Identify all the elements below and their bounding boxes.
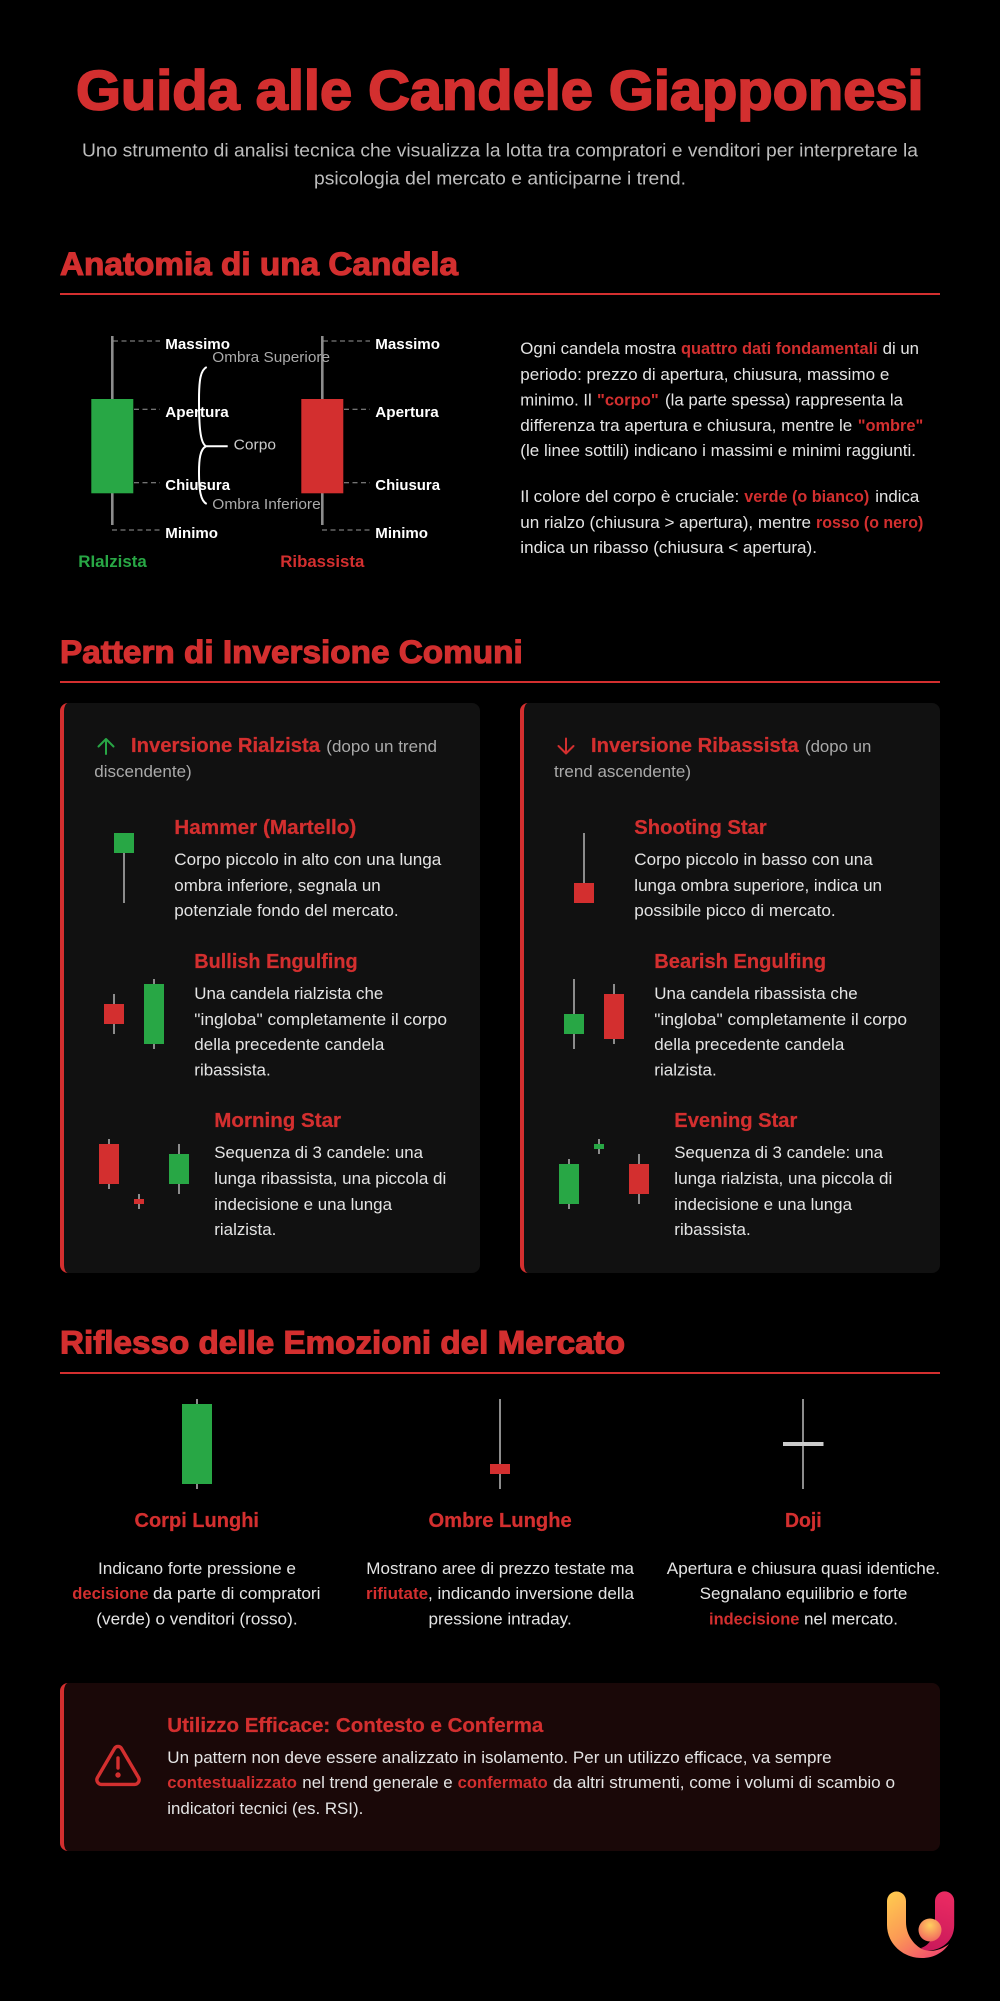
icon: bearish engulfing [564, 979, 624, 1049]
pattern: shooting star [634, 816, 882, 920]
pattern: evening star: lunga rialzista, una piccola di [674, 1170, 892, 1188]
icon: morning star [99, 1139, 189, 1209]
callout text [167, 1749, 895, 1818]
bullish candle [91, 336, 231, 542]
bearish candle [301, 336, 441, 542]
column: doji [667, 1399, 940, 1629]
pattern: hammer: Hammer (Martello) [174, 816, 356, 839]
pattern: morning star [214, 1109, 446, 1239]
callout text: indicatori tecnici (es. RSI). [167, 1800, 363, 1818]
panel: inversione ribassista [520, 703, 940, 1273]
pattern: bullish engulfing: ribassista. [194, 1062, 271, 1080]
icon: down arrow [558, 738, 574, 754]
subtitle: psicologia del mercato e anticiparne i trend. [314, 168, 686, 188]
icon: long shadow candle [490, 1399, 510, 1489]
pattern: bullish engulfing: della precedente candela [194, 1036, 385, 1054]
panel: inversione rialzista [60, 703, 480, 1273]
callout text: contestualizzato [167, 1774, 297, 1792]
anatomy description: "corpo" [597, 391, 659, 409]
icon: shooting star [574, 833, 594, 903]
pattern: bearish engulfing: della precedente candela [654, 1036, 845, 1054]
anatomy description: Il colore del corpo è cruciale: [520, 488, 739, 506]
bullish candle: Apertura [165, 404, 229, 421]
pattern: morning star: Morning Star [214, 1109, 341, 1132]
panel heading: (dopo un trend [326, 738, 437, 756]
callout: contesto e conferma [60, 1683, 940, 1851]
column text: (verde) o venditori (rosso). [96, 1611, 298, 1629]
column text: Apertura e chiusura quasi identiche. [667, 1560, 940, 1578]
pattern: shooting star: possibile picco di mercato. [634, 902, 836, 920]
icon: up arrow [98, 739, 114, 754]
icon: evening star [559, 1139, 649, 1209]
column text: da parte di compratori [153, 1585, 320, 1603]
column text: Indicano forte pressione e [98, 1560, 296, 1578]
callout background [60, 1683, 940, 1851]
pattern: evening star: ribassista. [674, 1221, 751, 1239]
bearish candle: Chiusura [375, 477, 441, 494]
heading: emozioni: Riflesso delle Emozioni del Mercato [60, 1324, 625, 1360]
heading: anatomia: Anatomia di una Candela [60, 246, 458, 282]
column text: indecisione [709, 1611, 799, 1629]
anatomy description: differenza tra apertura e chiusura, mentre le [520, 417, 852, 435]
heading: pattern: Pattern di Inversione Comuni [60, 634, 523, 670]
brace labels [212, 350, 330, 513]
pattern: bullish engulfing: Una candela rialzista che [194, 985, 383, 1003]
anatomy description: minimo. Il [520, 391, 592, 409]
pattern: morning star: rialzista. [214, 1221, 276, 1239]
pattern: evening star: Sequenza di 3 candele: una [674, 1144, 884, 1162]
pattern: evening star [674, 1109, 892, 1239]
icon: doji candle [783, 1399, 824, 1489]
icon: bullish engulfing [104, 979, 164, 1049]
column text: pressione intraday. [428, 1611, 572, 1629]
pattern: hammer: Corpo piccolo in alto con una lunga [174, 851, 442, 869]
pattern: bearish engulfing [654, 950, 907, 1080]
anatomy description: indica [875, 488, 920, 506]
icon: hammer [114, 833, 134, 903]
panel heading: (dopo un [805, 738, 871, 756]
callout text: confermato [458, 1774, 548, 1792]
pattern: shooting star: Corpo piccolo in basso con una [634, 851, 874, 869]
column title: Corpi Lunghi [134, 1509, 259, 1532]
column: ombre lunghe [366, 1399, 635, 1629]
icon: long body candle [182, 1399, 212, 1489]
anatomy description: quattro dati fondamentali [681, 340, 878, 358]
panel background [520, 703, 940, 1273]
column text: Segnalano equilibrio e forte [700, 1585, 907, 1603]
anatomy description: rosso (o nero) [816, 514, 923, 532]
column text: nel mercato. [804, 1611, 898, 1629]
anatomy description: (le linee sottili) indicano i massimi e minimi raggiunti. [520, 442, 916, 460]
column text [667, 1560, 940, 1629]
panel background [60, 703, 480, 1273]
column title: Doji [785, 1509, 822, 1532]
callout title: Utilizzo Efficace: Contesto e Conferma [167, 1714, 544, 1737]
panel heading [554, 734, 871, 781]
anatomy diagram [78, 336, 441, 571]
callout text: nel trend generale e [302, 1774, 453, 1792]
brace labels: Corpo [234, 438, 276, 454]
anatomy description: indica un ribasso (chiusura < apertura). [520, 539, 817, 557]
anatomy description: di un [883, 340, 919, 358]
pattern: morning star: Sequenza di 3 candele: una [214, 1144, 424, 1162]
title: Guida alle Candele Giapponesi [76, 58, 924, 122]
pattern: morning star: lunga ribassista, una piccola di [214, 1170, 446, 1188]
column text: rifiutate [366, 1585, 428, 1603]
column text: , indicando inversione della [428, 1585, 635, 1603]
bullish candle: Minimo [165, 525, 218, 542]
pattern: hammer [174, 816, 442, 920]
pattern: hammer: ombra inferiore, segnala un [174, 877, 381, 895]
anatomy description: verde (o bianco) [744, 488, 869, 506]
pattern: morning star: indecisione e una lunga [214, 1196, 393, 1214]
candle captions: RIalzista [78, 553, 148, 571]
pattern: shooting star: Shooting Star [634, 816, 767, 839]
pattern: evening star: Evening Star [674, 1109, 797, 1132]
subtitle [82, 140, 919, 188]
pattern: hammer: potenziale fondo del mercato. [174, 902, 399, 920]
anatomy description: "ombre" [858, 417, 923, 435]
candle captions [78, 553, 365, 571]
bullish candle: Massimo [165, 336, 230, 353]
pattern: bearish engulfing: Bearish Engulfing [654, 950, 826, 973]
panel heading: Inversione Ribassista [591, 734, 799, 757]
panel heading: Inversione Rialzista [131, 734, 321, 757]
bearish candle: Apertura [375, 404, 439, 421]
icon: warning triangle [97, 1746, 139, 1784]
brace labels: Ombra Superiore [212, 350, 330, 366]
bullish candle: Chiusura [165, 477, 231, 494]
pattern: bullish engulfing [194, 950, 447, 1080]
column text: Mostrano aree di prezzo testate ma [366, 1560, 635, 1578]
panel heading [94, 734, 437, 781]
logo [887, 1891, 954, 1958]
column text [366, 1560, 635, 1629]
anatomy description: Ogni candela mostra [520, 340, 677, 358]
column: corpi lunghi [72, 1399, 320, 1629]
pattern: bearish engulfing: Una candela ribassista che [654, 985, 858, 1003]
anatomy description: un rialzo (chiusura > apertura), mentre [520, 514, 811, 532]
anatomy description: periodo: prezzo di apertura, chiusura, massimo e [520, 366, 889, 384]
bearish candle: Massimo [375, 336, 440, 353]
column text: decisione [72, 1585, 149, 1603]
brace labels: Ombra Inferiore [212, 497, 321, 513]
pattern: bullish engulfing: Bullish Engulfing [194, 950, 358, 973]
candle captions: Ribassista [280, 553, 365, 571]
brace [199, 367, 228, 504]
pattern: evening star: indecisione e una lunga [674, 1196, 853, 1214]
bearish candle: Minimo [375, 525, 428, 542]
pattern: bullish engulfing: "ingloba" completamente il corpo [194, 1011, 447, 1029]
callout text: da altri strumenti, come i volumi di scambio o [553, 1774, 895, 1792]
pattern: shooting star: lunga ombra superiore, indica un [634, 877, 882, 895]
panel heading: trend ascendente) [554, 763, 691, 781]
column title: Ombre Lunghe [428, 1509, 572, 1532]
panel heading: discendente) [94, 763, 192, 781]
pattern: bearish engulfing: rialzista. [654, 1062, 717, 1080]
anatomy description [520, 340, 923, 557]
column text [72, 1560, 320, 1629]
pattern: bearish engulfing: "ingloba" completamente il corpo [654, 1011, 907, 1029]
anatomy description: (la parte spessa) rappresenta la [665, 391, 904, 409]
subtitle: Uno strumento di analisi tecnica che visualizza la lotta tra compratori e venditori per interpretare la [82, 140, 919, 160]
callout text: Un pattern non deve essere analizzato in isolamento. Per un utilizzo efficace, va sempre [167, 1749, 832, 1767]
